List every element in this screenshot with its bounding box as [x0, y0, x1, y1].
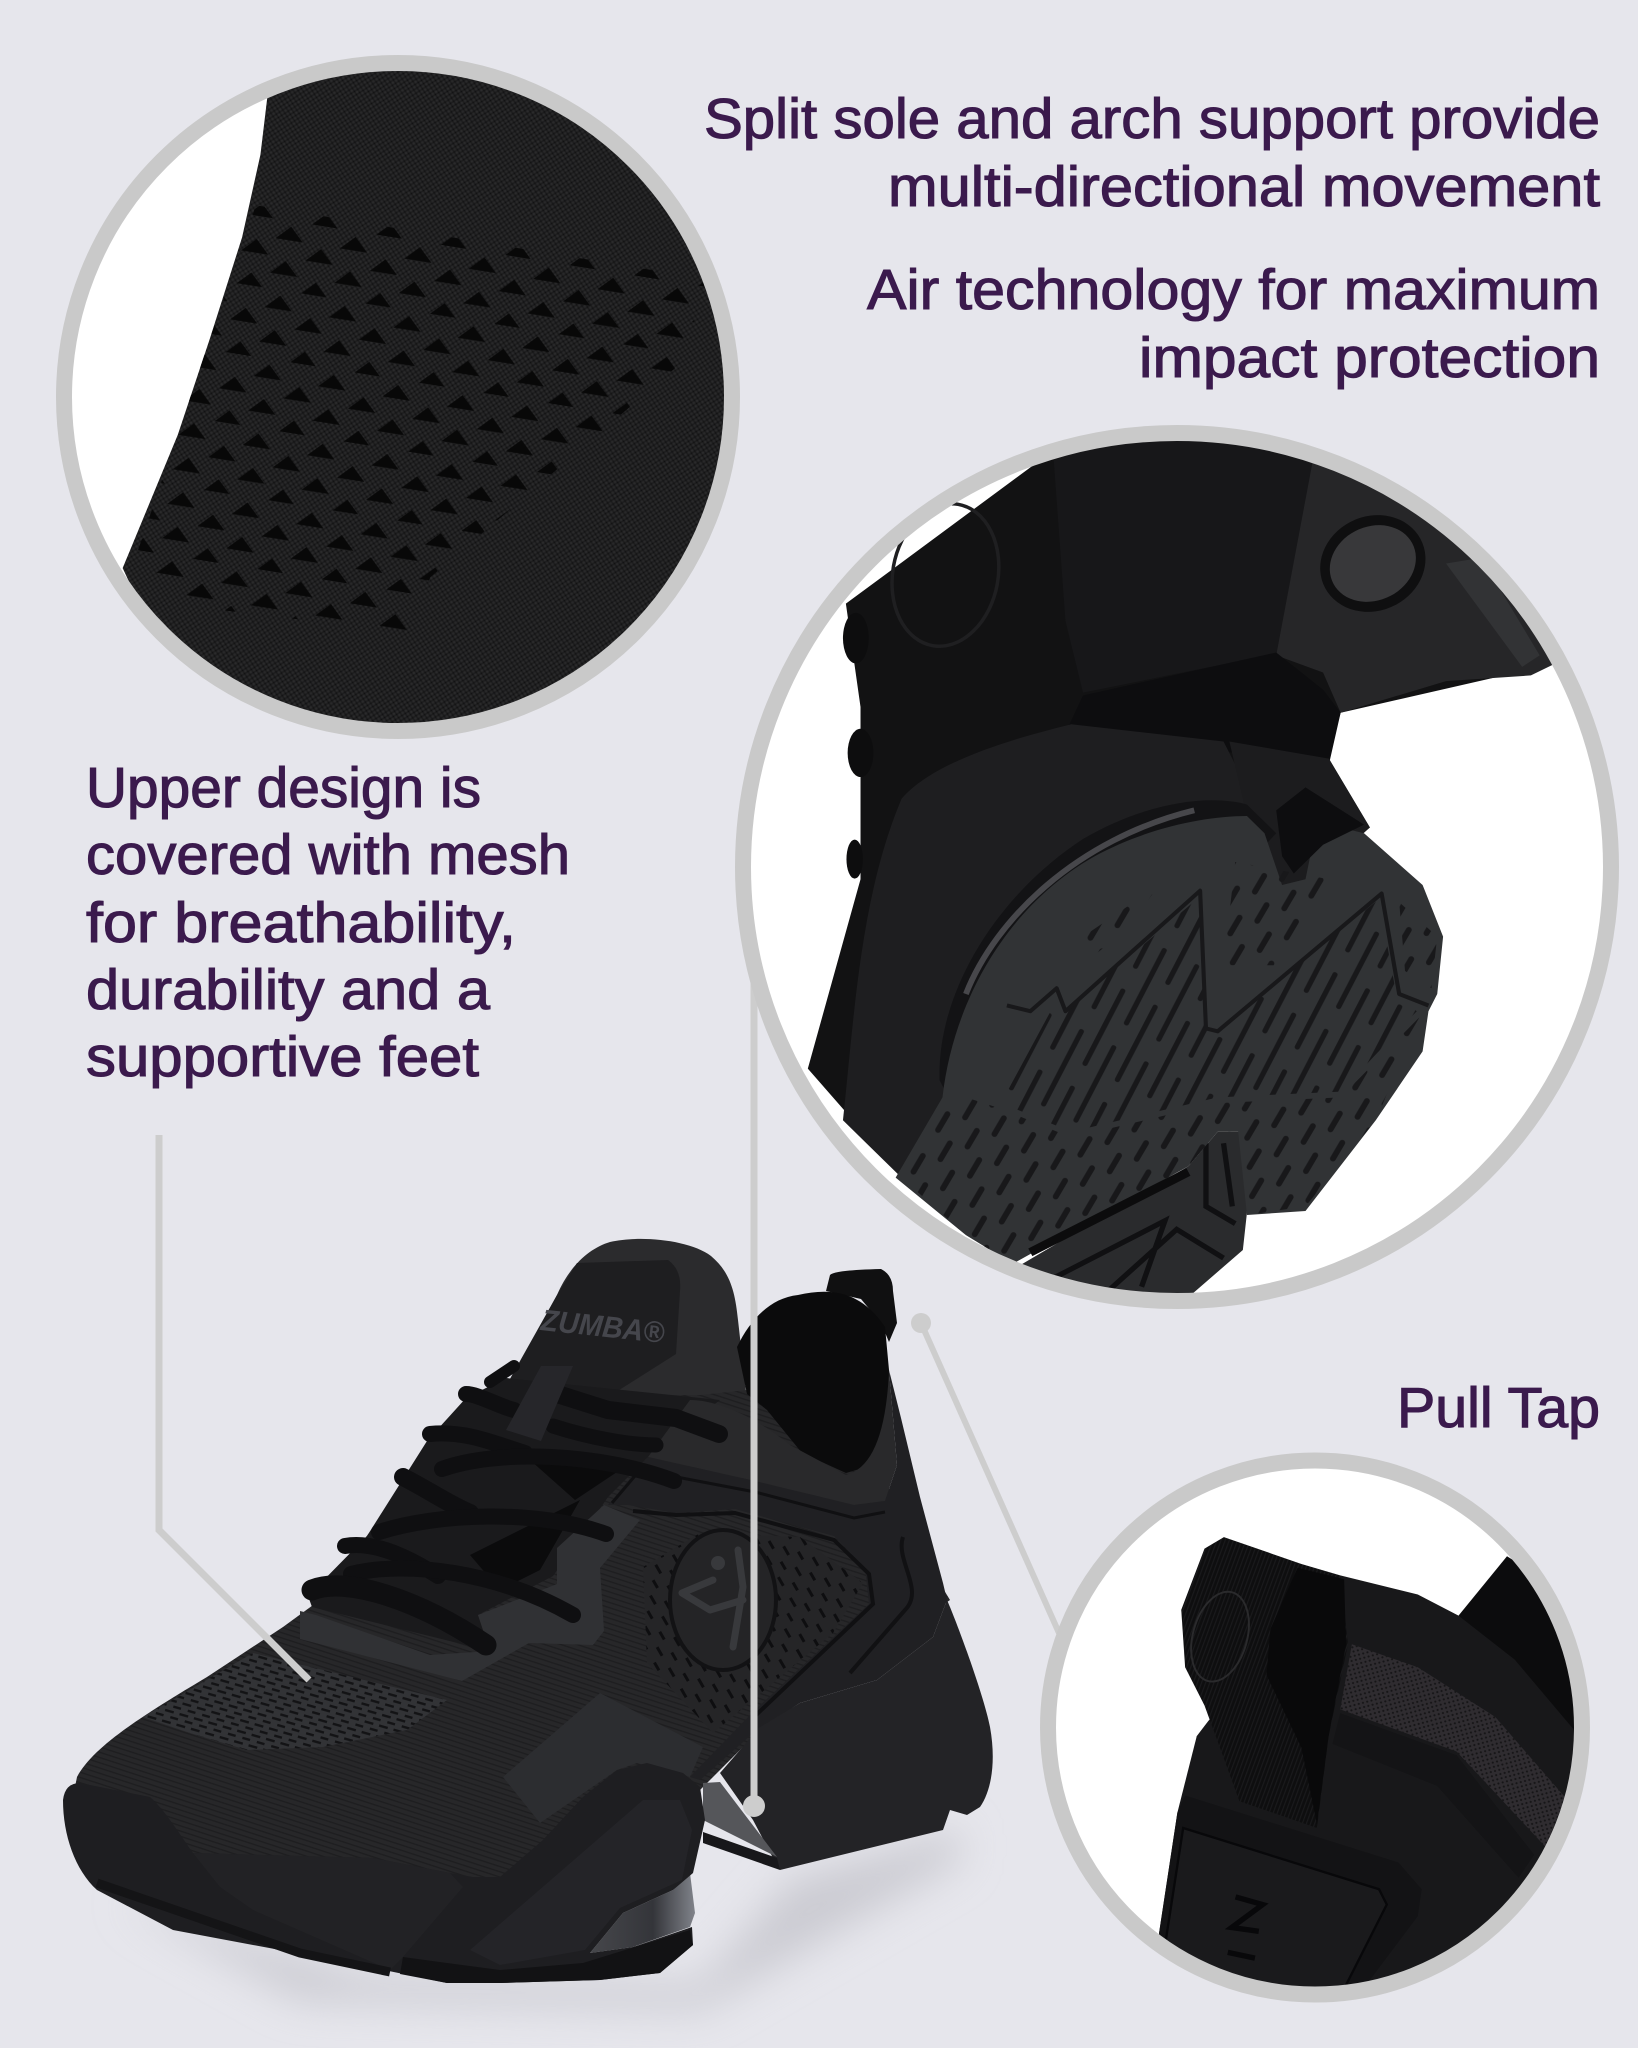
upper dashes centre	[1224, 862, 1329, 965]
throat with tongue knit	[308, 1378, 720, 1651]
forefoot sidewall	[193, 1853, 463, 1970]
knit fabric	[122, 71, 724, 723]
heel panel	[1158, 1812, 1388, 1984]
midsole corner	[1229, 741, 1370, 885]
air window	[939, 800, 1276, 1097]
lace overlay panel	[300, 1505, 640, 1681]
heel counter frame	[608, 1370, 947, 1780]
perforation rows	[132, 205, 706, 632]
knit upper	[70, 1390, 950, 1900]
text: upper design: supportive feet	[86, 1025, 479, 1089]
black groove	[1030, 1172, 1188, 1252]
heel sole	[720, 1600, 993, 1870]
midfoot overlay patch	[503, 1693, 703, 1823]
air bubble	[590, 1873, 695, 1953]
heel gap wedge	[703, 1782, 780, 1870]
short tread dashes	[902, 1017, 1420, 1264]
upper dashes right	[1399, 902, 1437, 988]
text: pull tap: Pull Tap	[1397, 1376, 1600, 1440]
shoe shadow	[120, 1830, 960, 2010]
outsole notch	[1276, 787, 1364, 873]
text: upper design: Upper design is	[86, 756, 481, 820]
side mesh panel	[643, 1533, 863, 1733]
lace shadow triangle	[470, 1460, 620, 1590]
text: air technology: impact protection	[1139, 326, 1600, 390]
text: upper design: durability and a	[86, 958, 490, 1022]
upper rear block	[1277, 464, 1552, 713]
mesh band	[1340, 1644, 1565, 1847]
forefoot lugs	[1013, 1132, 1247, 1298]
toe outsole strip	[97, 1883, 390, 1972]
text: upper design: for breathability,	[86, 891, 516, 955]
panel: mesh close-up circle	[56, 55, 740, 739]
lower band	[1332, 1713, 1534, 1878]
callout line: pull tap	[911, 1313, 1059, 1633]
callout line: upper mesh	[159, 1135, 309, 1680]
heel tread	[1446, 558, 1540, 667]
text: air technology: Air technology for maximum	[867, 258, 1600, 322]
glossy shank	[1235, 652, 1341, 760]
heel disc	[1320, 515, 1426, 612]
text: split sole	[704, 87, 1600, 219]
text: upper design	[86, 756, 570, 1089]
outsole	[896, 816, 1443, 1264]
long tread lines	[1001, 896, 1417, 1132]
tongue strap	[506, 1366, 573, 1441]
text: upper design: covered with mesh	[86, 823, 570, 887]
zigzag logo line	[1007, 891, 1428, 1031]
collar knit band	[648, 1370, 897, 1505]
panel: sole close-up circle	[743, 431, 1611, 1301]
panel: pull tab close-up circle	[1048, 1460, 1612, 2004]
heel counter	[1080, 441, 1202, 452]
callout line: air technology	[743, 960, 765, 1817]
sole base band	[400, 1930, 693, 1983]
main shoe illustration	[63, 1239, 993, 1983]
text: split sole: Split sole and arch support provide	[704, 87, 1600, 151]
midsole band	[843, 724, 1370, 1189]
tongue: ZUMBA®	[538, 1304, 667, 1350]
text: split sole: multi-directional movement	[888, 155, 1600, 219]
toe mesh	[143, 1653, 447, 1750]
upper dashes left	[1088, 894, 1152, 952]
tab loop	[1181, 1537, 1348, 1828]
tongue	[500, 1239, 747, 1400]
collar opening	[737, 1292, 889, 1473]
collar interior	[1458, 1556, 1574, 1740]
laces	[312, 1366, 719, 1645]
logo medallion	[670, 1530, 776, 1670]
front sole	[63, 1763, 705, 1983]
knit side and lace bumps	[808, 456, 1494, 1110]
collar band	[1154, 1575, 1581, 2004]
pull tab on shoe	[826, 1269, 897, 1342]
text: air technology	[867, 258, 1600, 390]
